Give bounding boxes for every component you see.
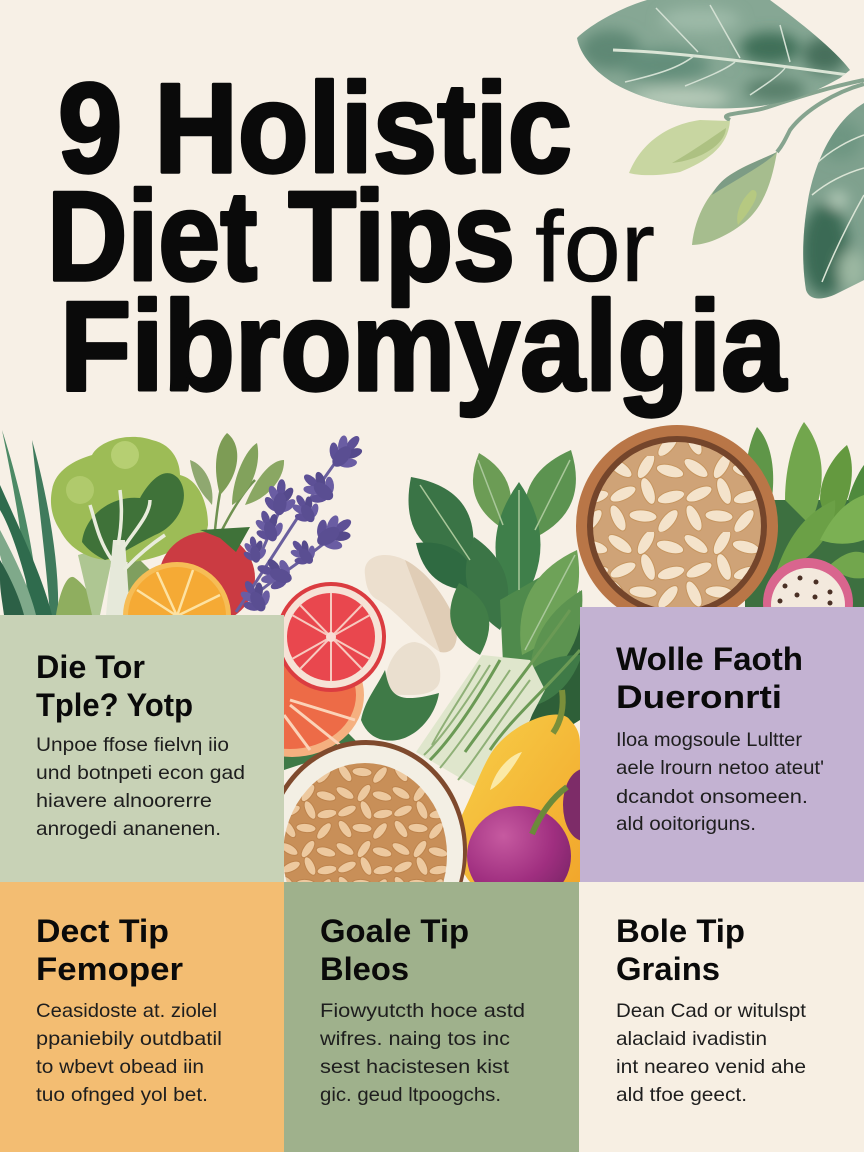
panel: bottom middle green: gic. geud ltpoogchs.: [320, 1084, 501, 1106]
panel: bottom right cream: Grains: [616, 951, 720, 987]
panel: top left green: anrogedi ananenen.: [36, 818, 221, 840]
panel: bottom middle green: Fiowyutcth hoce astd: [320, 1000, 525, 1022]
panel: bottom left orange: ppaniebily outdbatil: [36, 1028, 222, 1050]
illustration: lower grain bowl: [265, 740, 467, 960]
title: 9 Holistic: [58, 57, 572, 199]
illustration: orange slice: [123, 562, 231, 670]
panel: bottom middle green: [284, 882, 579, 1152]
panel: top right purple: [580, 607, 864, 882]
panel: top left green: [0, 615, 284, 882]
panel: bottom left orange: Ceasidoste at. ziolel: [36, 1000, 217, 1022]
panel: bottom right cream: [579, 882, 864, 1152]
illustration: broccoli: [51, 437, 208, 615]
illustration: yellow pepper: [455, 690, 580, 882]
panel: bottom left orange: Femoper: [36, 951, 183, 987]
illustration: ginger root: [365, 555, 457, 695]
leaf: dark right: [800, 100, 864, 305]
panel: bottom middle green: wifres. naing tos inc: [319, 1028, 510, 1050]
panel: bottom middle green: sest hacistesen kist: [320, 1056, 510, 1078]
illustration: red tomato: [159, 527, 255, 624]
panel: top left green: hiavere alnoorerre: [36, 790, 212, 812]
panel: top right purple: aele lrourn netoo ateut': [616, 757, 824, 779]
illustration: dragon fruit: [763, 558, 853, 648]
illustration: leaves behind bowl right: [745, 422, 864, 610]
panel: bottom left orange: tuo ofnged yol bet.: [36, 1084, 208, 1106]
panel: bottom right cream: int neareo venid ahe: [616, 1056, 806, 1078]
illustration: herb sprig: [190, 433, 284, 530]
panel: bottom left orange: Dect Tip: [36, 913, 169, 949]
panel: top left green: Tple? Yotp: [36, 687, 193, 723]
title: Fibromyalgia: [60, 275, 787, 417]
panel: bottom right cream: alaclaid ivadistin: [616, 1028, 767, 1050]
panel: bottom right cream: Dean Cad or witulspt: [616, 1000, 807, 1022]
illustration: lavender: [232, 425, 373, 619]
panel: top right purple: Wolle Faoth: [616, 641, 803, 677]
panel: bottom left orange: [0, 882, 284, 1152]
panel: top right purple: Iloa mogsoule Lultter: [616, 729, 803, 751]
panel: bottom left orange: to wbevt obead iin: [36, 1056, 204, 1078]
title word: for: for: [535, 191, 655, 303]
panel: top right purple: ald ooitoriguns.: [616, 813, 756, 835]
panel: bottom middle green: Bleos: [320, 951, 409, 987]
panel: top left green: Die Tor: [36, 649, 145, 685]
panel: bottom right cream: ald tfoe geect.: [616, 1084, 747, 1106]
panel: bottom right cream: Bole Tip: [616, 913, 745, 949]
title: [47, 57, 787, 417]
icon: watercolor leaves top right: [570, 0, 864, 305]
leaf: pale green left: [629, 120, 730, 175]
illustration: purple fruits: [467, 769, 605, 906]
panel: top left green: und botnpeti econ gad: [36, 762, 245, 784]
illustration: grass blades: [0, 430, 58, 615]
panel: top left green: Unpoe ffose fielvη iio: [36, 734, 229, 756]
panel: top right purple: dcandot onsomeen.: [616, 786, 808, 808]
panel: bottom middle green: Goale Tip: [320, 913, 469, 949]
panel: top right purple: Dueronrti: [616, 679, 782, 715]
illustration: grapefruit slice: [276, 582, 386, 692]
illustration: spinach bunch: [284, 450, 582, 795]
title: Diet Tips: [47, 165, 515, 307]
leaf: mid green lower: [692, 152, 777, 245]
illustration: upper grain bowl: [576, 425, 778, 627]
illustration: lower citrus slice: [220, 633, 364, 757]
